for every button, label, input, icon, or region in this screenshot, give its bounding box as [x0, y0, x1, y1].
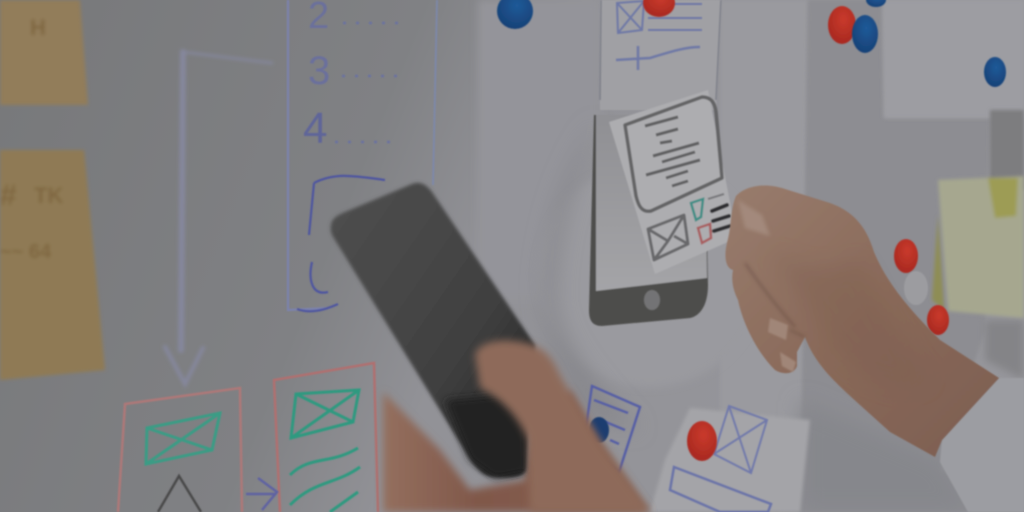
shirt sleeve	[940, 378, 1024, 512]
dark lower end of the phone	[445, 395, 526, 478]
long blue arrow	[165, 52, 272, 384]
right sticky note	[932, 176, 1024, 318]
left wireframe card	[118, 388, 242, 512]
numbered list sheet: 4	[303, 104, 327, 153]
numbered list sheet: 3	[308, 49, 330, 93]
lower wireframe paper with pin	[650, 406, 810, 512]
push pins	[497, 0, 1006, 461]
right wireframe card	[274, 363, 378, 512]
sticky notes, left	[0, 0, 105, 380]
numbered list sheet	[288, 0, 437, 311]
small arrow between cards	[246, 478, 277, 510]
sticky notes, left: H	[30, 15, 46, 40]
phone template sketch	[589, 115, 708, 326]
sticky notes, left: ~~ 64	[0, 241, 52, 263]
paper sheets on the board	[478, 0, 1024, 512]
phone in the blurred left hand	[331, 183, 650, 512]
top sketch sheet	[600, 0, 721, 100]
blue list card	[584, 386, 640, 472]
thumb of left hand	[475, 341, 650, 512]
sticky notes, left: TK	[34, 183, 63, 208]
sticky notes, left: #	[0, 179, 17, 212]
right hand holding the card	[725, 185, 999, 457]
paper card held by the hand	[609, 90, 737, 274]
